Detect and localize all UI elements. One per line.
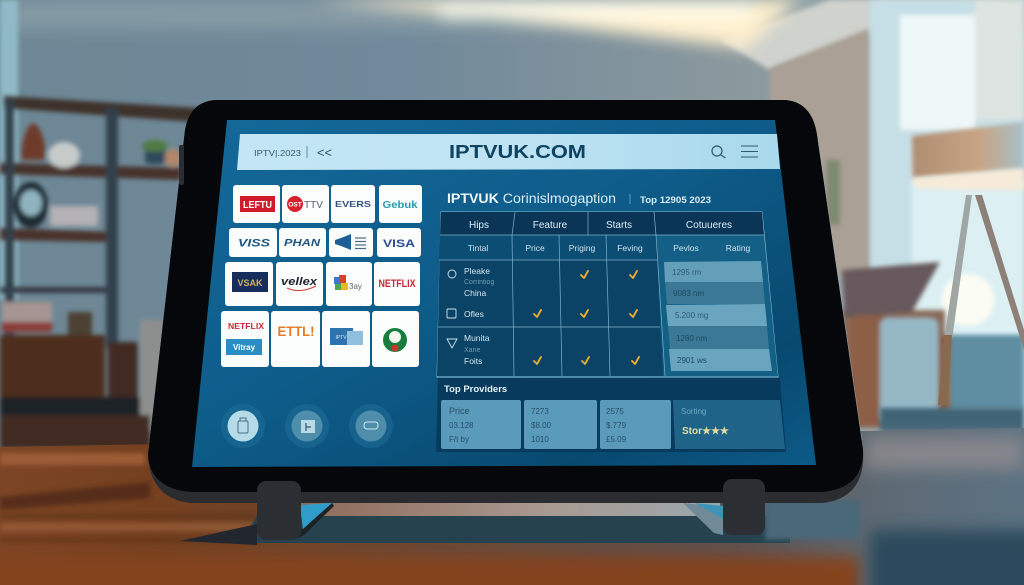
price card bbox=[441, 400, 521, 449]
logo: Phan: PHAN bbox=[284, 238, 321, 249]
logo: Netflix and Vitray bbox=[221, 311, 269, 367]
reflection under tablet bbox=[300, 498, 720, 516]
logo: Vellex bbox=[276, 262, 323, 306]
price card: Price bbox=[449, 406, 470, 416]
logo: Visa: VISA bbox=[383, 238, 415, 250]
value card one: 1010 bbox=[531, 435, 549, 444]
value card two: 2575 bbox=[606, 407, 624, 416]
icon: menu bbox=[741, 146, 758, 157]
review rows: 1295 rm bbox=[672, 268, 702, 277]
top providers panel bbox=[436, 378, 786, 452]
logo: Leftu: LEFTU bbox=[243, 200, 272, 211]
radiator bbox=[948, 335, 1024, 410]
logo: Vellex: vellex bbox=[281, 276, 318, 288]
window bbox=[870, 0, 1024, 400]
value card two bbox=[600, 400, 671, 449]
sub header row: Pevlos bbox=[673, 243, 699, 253]
value card two: $.779 bbox=[606, 421, 627, 430]
review rows bbox=[664, 261, 772, 371]
review rows: 2901 ws bbox=[677, 356, 707, 365]
price card: F/t by bbox=[449, 435, 469, 444]
logo: Vsak bbox=[225, 262, 273, 306]
logo: Gebuk bbox=[379, 185, 422, 223]
row labels bbox=[464, 266, 494, 366]
value card one bbox=[524, 400, 597, 449]
logo: Viss bbox=[229, 228, 277, 257]
logo: Ettl: ETTL! bbox=[278, 323, 314, 339]
icon: bag button bbox=[221, 404, 265, 448]
ceiling bbox=[720, 0, 1024, 70]
header row: Cotuueres bbox=[686, 220, 732, 231]
logo: Viss: VISS bbox=[238, 238, 271, 250]
rating card: Sorting bbox=[681, 407, 706, 416]
header row: Starts bbox=[606, 220, 632, 231]
logo: 3ay bbox=[326, 262, 372, 306]
logo: Netflix and Vitray: Vitray bbox=[233, 343, 256, 352]
plant bbox=[826, 160, 840, 225]
row labels: Corrintiog bbox=[464, 279, 494, 286]
logo: cloud: IPTV bbox=[335, 335, 347, 341]
tablet stand bbox=[257, 479, 765, 540]
shelf bbox=[0, 96, 198, 449]
table grid lines bbox=[438, 212, 764, 376]
logo: Phan bbox=[279, 228, 326, 257]
logo: Visa bbox=[377, 228, 421, 257]
sub header row: Rating bbox=[726, 243, 751, 253]
icon: flag button bbox=[285, 404, 329, 448]
row labels: Munita bbox=[464, 333, 490, 343]
site name: IPTVUK.COM bbox=[449, 142, 586, 162]
logo: Evers bbox=[331, 185, 375, 223]
row icons bbox=[447, 270, 457, 348]
logo: Vsak: VSAK bbox=[237, 278, 263, 288]
value card one: $8.00 bbox=[531, 421, 552, 430]
back chevrons: << bbox=[317, 145, 332, 160]
row labels: Foits bbox=[464, 356, 482, 366]
logo: Netflix: NETFLIX bbox=[378, 278, 416, 290]
logo: green crest bbox=[372, 311, 419, 367]
row labels: China bbox=[464, 288, 486, 298]
value card one: 7273 bbox=[531, 407, 549, 416]
nav label: IPTV|.2023 bbox=[254, 148, 301, 158]
logo: OST TTV: OST bbox=[288, 202, 302, 208]
price card: 03.128 bbox=[449, 421, 474, 430]
sub header row: Priging bbox=[569, 243, 595, 253]
logo: Ettl bbox=[271, 311, 320, 367]
top navigation bar bbox=[237, 134, 780, 170]
ceiling light bbox=[310, 0, 800, 48]
tablet screen bbox=[192, 120, 816, 467]
sub header row: Feving bbox=[617, 243, 643, 253]
row labels: Pleake bbox=[464, 266, 490, 276]
bottom icon row bbox=[221, 404, 393, 448]
rating card bbox=[673, 400, 785, 449]
review rows: 5.200 mg bbox=[675, 311, 708, 320]
header row: Hips bbox=[469, 220, 489, 231]
right foot bbox=[683, 479, 765, 535]
comparison heading: Top 12905 2023 bbox=[640, 195, 711, 206]
comparison heading bbox=[447, 191, 711, 206]
value card two: £5.09 bbox=[606, 435, 627, 444]
logo: speaker bbox=[329, 228, 373, 257]
comparison heading: IPTVUK Corinislmogaption bbox=[447, 191, 616, 206]
left foot bbox=[257, 481, 334, 540]
icon: chat button bbox=[349, 404, 393, 448]
lamp bbox=[912, 122, 1024, 405]
logo: OST TTV: TTV bbox=[304, 200, 323, 211]
icon: search bbox=[712, 146, 726, 158]
sub header row bbox=[468, 243, 751, 253]
comparison table bbox=[437, 212, 778, 377]
row labels: Ofles bbox=[464, 309, 484, 319]
beige wall bbox=[770, 28, 870, 275]
logo: Leftu bbox=[233, 185, 280, 223]
floor strip bbox=[880, 408, 1024, 432]
rating card: Stor★★★ bbox=[682, 426, 729, 437]
review rows: 9083 nm bbox=[673, 289, 704, 298]
side button bbox=[179, 145, 184, 185]
tablet body bbox=[148, 100, 863, 503]
header row: Feature bbox=[533, 220, 568, 231]
header row bbox=[469, 220, 732, 231]
logo: OST TTV bbox=[282, 185, 329, 223]
logo: cloud bbox=[322, 311, 370, 367]
logo: 3ay: 3ay bbox=[349, 282, 362, 291]
table panels bbox=[437, 212, 778, 377]
panel heading: Top Providers bbox=[444, 384, 507, 395]
sub header row: Price bbox=[525, 243, 545, 253]
sofa bbox=[835, 262, 950, 428]
review rows: 1280 nm bbox=[676, 334, 707, 343]
wooden table bbox=[0, 428, 1024, 585]
logo grid bbox=[221, 185, 422, 367]
logo: Gebuk: Gebuk bbox=[382, 200, 418, 211]
sub header row: Tintal bbox=[468, 243, 488, 253]
row labels: Xane bbox=[464, 347, 480, 354]
logo: Evers: EVERS bbox=[335, 199, 371, 209]
logo: Netflix bbox=[374, 262, 420, 306]
check marks bbox=[534, 271, 639, 364]
logo: Netflix and Vitray: NETFLIX bbox=[228, 321, 264, 331]
